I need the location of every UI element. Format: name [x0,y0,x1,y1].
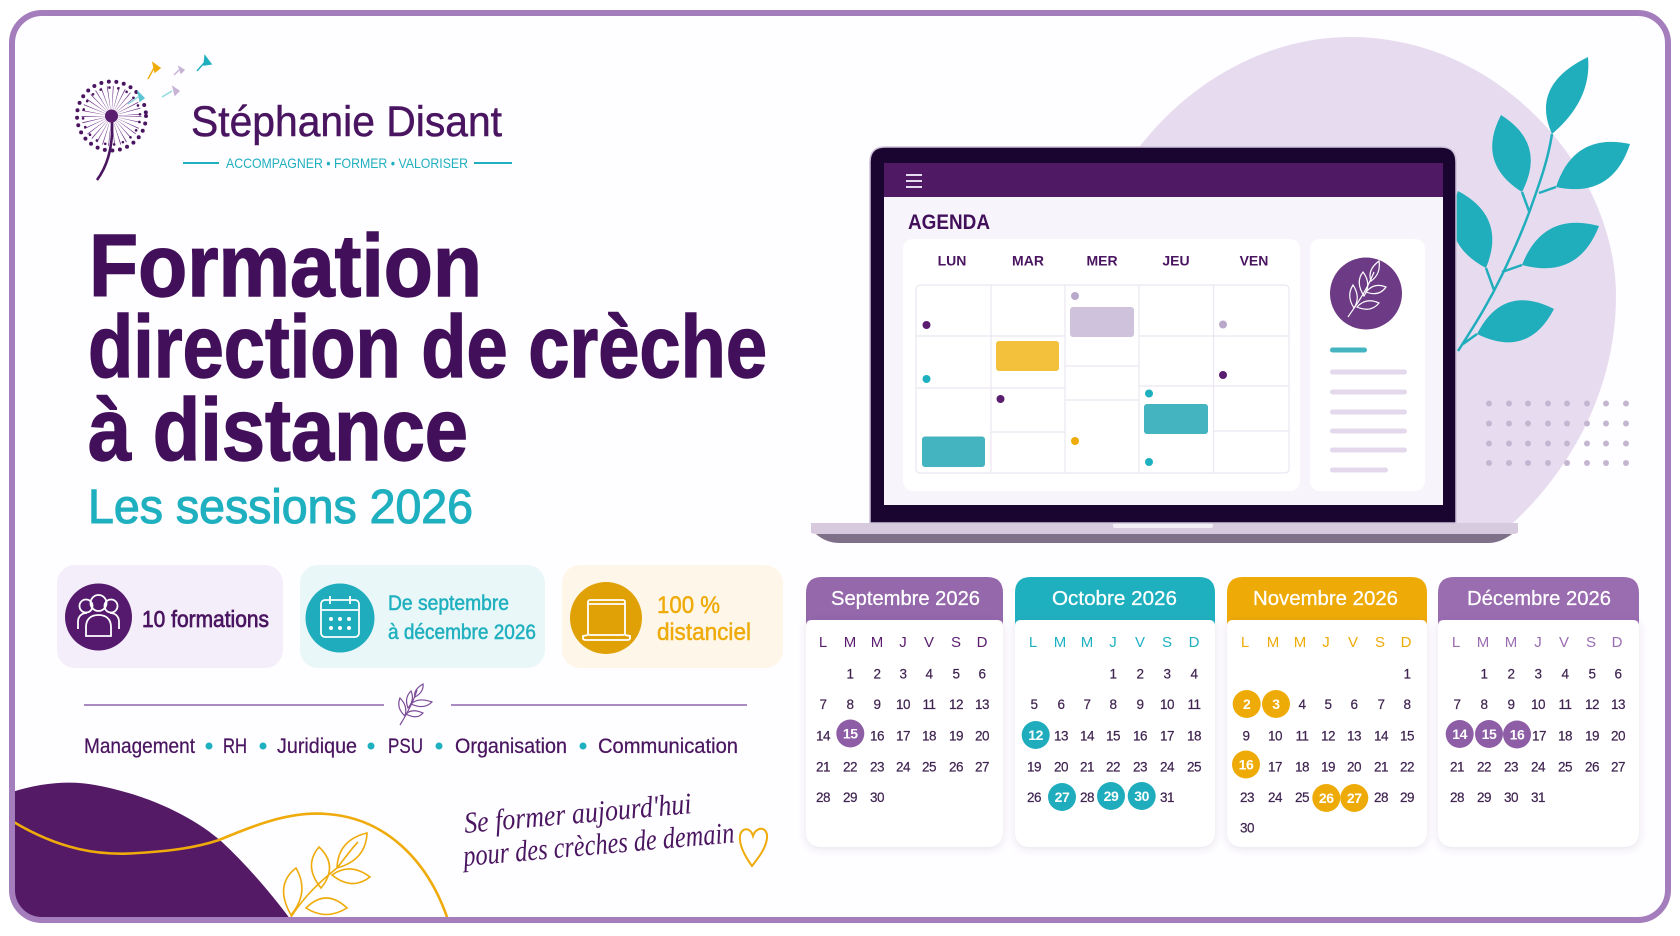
dates: 14 [1080,728,1095,744]
month card: septembre [806,577,1003,847]
dates: 28 [1374,790,1388,805]
topics row [84,735,738,758]
dates: 20 [975,728,989,744]
dates: 21 [816,760,830,774]
weekday row: M [1267,634,1279,651]
title: direction de crèche [88,297,767,396]
dates: 3 [1163,666,1171,682]
dates [1446,666,1625,805]
weekday row: V [1135,634,1145,651]
dates: 3 [1534,666,1542,682]
dates: 15 [1106,728,1120,744]
month card: decembre [1438,577,1639,847]
dates: 24 [1268,790,1283,805]
dates: 1 [1109,666,1117,682]
dates: 10 [1160,697,1174,712]
month card: novembre [1227,577,1427,847]
dates: 26 [1585,760,1599,774]
weekday row: M [1477,634,1489,651]
weekday row: D [977,634,988,651]
dates: 8 [1480,697,1488,712]
dates: 20 [1054,760,1068,774]
dates: 2 [1136,666,1144,682]
dates: 23 [1504,760,1518,774]
dates: 16 [1239,756,1254,772]
month card: octobre: Octobre 2026 [1052,588,1177,610]
dates: 28 [1080,790,1094,805]
title [88,216,767,479]
dates: 11 [1187,697,1201,712]
icon: white sprig [1348,261,1386,317]
dates: 5 [1588,666,1596,682]
screen [884,197,1443,505]
gold sprig [284,833,370,917]
dates: 27 [1347,790,1362,806]
topics row: RH [223,735,247,758]
info pill: 10 formations: 10 formations [142,606,269,632]
weekday row: D [1401,634,1412,651]
dates: 7 [819,697,827,712]
calendar panel [903,239,1300,491]
dates: 25 [1558,760,1572,774]
dates: 18 [922,728,936,744]
dates: 26 [1027,790,1041,805]
event dots [922,292,1227,466]
dates: 2 [1507,666,1515,682]
dates [1022,666,1201,811]
dates [816,666,989,805]
event blocks [922,307,1208,467]
topics row: Juridique [277,735,357,758]
topics row: Management [84,735,195,758]
dates: 16 [1510,726,1525,742]
dates: 11 [1295,728,1309,744]
script tagline [460,787,736,873]
logo [77,56,512,180]
weekday row: D [1189,634,1200,651]
dates: 19 [949,728,963,744]
weekday labels: LUN [938,252,966,268]
dates: 27 [1611,760,1625,774]
weekday row: M [1054,634,1066,651]
dates: 21 [1374,760,1388,774]
dates: 14 [1374,728,1389,744]
dates: 24 [1531,760,1546,774]
dates: 3 [899,666,907,682]
dates: 8 [1109,697,1117,712]
weekday row [819,634,988,651]
dates: 22 [1400,760,1414,774]
icon: heart [740,829,767,866]
weekday row: V [924,634,934,651]
weekday row: M [1081,634,1093,651]
dates: 13 [1347,728,1361,744]
dates: 16 [870,728,884,744]
dates: 8 [846,697,854,712]
dates: 16 [1133,728,1147,744]
dates: 30 [870,790,884,805]
info pill: distanciel: 100 % [657,592,720,619]
dates: 3 [1272,696,1280,712]
dates: 18 [1558,728,1572,744]
dates: 9 [1242,728,1250,744]
icon: laptop [583,600,630,640]
dates: 22 [843,760,857,774]
dates: 13 [1611,697,1625,712]
dates: 6 [1350,697,1358,712]
info pill: dates: De septembre [388,592,509,615]
weekday labels: MAR [1012,252,1044,268]
weekday row [1029,634,1200,651]
laptop illustration [811,147,1518,543]
dates: 15 [1400,728,1414,744]
laptop base [811,523,1518,543]
weekday row: D [1612,634,1623,651]
decorative dot grid [1486,400,1629,466]
dates: 21 [1450,760,1464,774]
weekday row: M [844,634,856,651]
side panel [1310,239,1425,491]
dates: 22 [1477,760,1491,774]
subtitle: Les sessions 2026 [88,481,473,534]
background lilac blob [1140,37,1616,523]
info pill: dates: à décembre 2026 [388,621,536,644]
weekday row: J [1534,634,1542,651]
dates: 1 [846,666,854,682]
dates: 17 [896,728,910,744]
dates: 2 [1243,696,1251,712]
dates: 26 [1319,790,1334,806]
info pill: 10 formations [57,565,283,668]
dates: 17 [1268,760,1282,774]
dates: 6 [1057,697,1065,712]
dates: 23 [870,760,884,774]
dates: 14 [1452,726,1468,742]
dates: 24 [896,760,911,774]
dates: 14 [816,728,831,744]
dates: 29 [1400,790,1414,805]
dates: 5 [952,666,960,682]
dates: 24 [1160,760,1175,774]
dates: 10 [1268,728,1282,744]
weekday row: M [1505,634,1517,651]
dates: 28 [1450,790,1464,805]
icon: calendar [321,596,359,637]
teal leafy branch [1452,57,1630,351]
dates: 25 [1187,760,1201,774]
logo tagline: ACCOMPAGNER • FORMER • VALORISER [226,155,468,171]
calendar grid [916,285,1289,473]
dates: 9 [873,697,881,712]
weekday row: L [1029,634,1037,651]
title: à distance [88,380,468,479]
dates: 15 [843,726,858,742]
weekday row: S [1162,634,1172,651]
weekday labels [938,252,1268,268]
weekday row: J [1109,634,1117,651]
dates: 17 [1532,728,1546,744]
dates: 31 [1160,790,1174,805]
dates: 4 [1190,666,1198,682]
weekday labels: MER [1086,252,1118,268]
app header [884,163,1443,197]
dates: 13 [975,697,989,712]
icon: dandelion [77,82,146,180]
title: Formation [89,216,482,315]
dates: 5 [1324,697,1332,712]
icon: people [78,595,119,636]
dates: 18 [1187,728,1201,744]
dates: 10 [1531,697,1545,712]
dates: 27 [975,760,989,774]
weekday row: L [1452,634,1460,651]
dates: 25 [1295,790,1309,805]
dates: 19 [1585,728,1599,744]
dates: 12 [1028,727,1044,743]
info pill: dates [300,565,545,668]
dates: 7 [1083,697,1091,712]
dates: 20 [1611,728,1625,744]
dates: 31 [1531,790,1545,805]
icon: menu [906,175,922,187]
weekday labels: JEU [1162,252,1190,268]
dates: 4 [925,666,933,682]
info pill: distanciel [562,565,783,668]
dates: 12 [949,697,963,712]
month card: decembre: Décembre 2026 [1467,588,1611,610]
dates: 29 [1104,788,1119,804]
weekday row [1241,634,1412,651]
dates: 1 [1403,666,1411,682]
dates: 22 [1106,760,1120,774]
dates: 19 [1027,760,1041,774]
topics row: Organisation [455,735,567,758]
dates: 30 [1504,790,1518,805]
month card: septembre: Septembre 2026 [831,588,980,610]
dates: 7 [1453,697,1461,712]
weekday row: M [1294,634,1306,651]
dates: 30 [1134,788,1150,804]
weekday labels: VEN [1240,252,1268,268]
laptop bezel [870,147,1456,523]
dates: 11 [1558,697,1572,712]
dates: 2 [873,666,881,682]
topics row: Communication [598,735,738,758]
weekday row: J [899,634,907,651]
dates: 12 [1321,728,1335,744]
weekday row: M [871,634,883,651]
info pill: distanciel: distanciel [657,619,751,646]
dates: 6 [978,666,986,682]
month card: novembre: Novembre 2026 [1253,588,1398,610]
icon: flying seeds [128,56,211,104]
weekday row: L [819,634,827,651]
dates [1232,666,1414,836]
dates: 29 [843,790,857,805]
logo name: Stéphanie Disant [191,98,502,146]
dates: 29 [1477,790,1491,805]
dates: 10 [896,697,910,712]
dates: 11 [922,697,936,712]
dates: 25 [922,760,936,774]
month card: octobre [1015,577,1215,847]
dates: 6 [1614,666,1622,682]
dates: 28 [816,790,830,805]
dates: 8 [1403,697,1411,712]
dates: 30 [1240,820,1254,836]
dates: 13 [1054,728,1068,744]
dates: 27 [1055,789,1070,805]
weekday row [1452,634,1623,651]
dates: 9 [1136,697,1144,712]
agenda heading: AGENDA [908,211,990,234]
weekday row: S [1586,634,1596,651]
dates: 15 [1482,726,1497,742]
dates: 5 [1030,697,1038,712]
divider with sprig [84,684,747,725]
dates: 4 [1561,666,1569,682]
dates: 21 [1080,760,1094,774]
dates: 20 [1347,760,1361,774]
weekday row: S [1375,634,1385,651]
dates: 19 [1321,760,1335,774]
dates: 26 [949,760,963,774]
weekday row: L [1241,634,1249,651]
weekday row: S [951,634,961,651]
dates: 23 [1240,790,1254,805]
dates: 1 [1480,666,1488,682]
dates: 12 [1585,697,1599,712]
dates: 17 [1160,728,1174,744]
weekday row: V [1348,634,1358,651]
dates: 4 [1298,697,1306,712]
topics row: PSU [388,735,423,758]
purple corner blob and gold wave [12,783,448,920]
dates: 23 [1133,760,1147,774]
dates: 18 [1295,760,1309,774]
weekday row: V [1559,634,1569,651]
script tagline: Se former aujourd'hui [463,787,693,840]
weekday row: J [1322,634,1330,651]
dates: 7 [1377,697,1385,712]
dates: 9 [1507,697,1515,712]
script tagline: pour des crèches de demain [460,816,736,873]
